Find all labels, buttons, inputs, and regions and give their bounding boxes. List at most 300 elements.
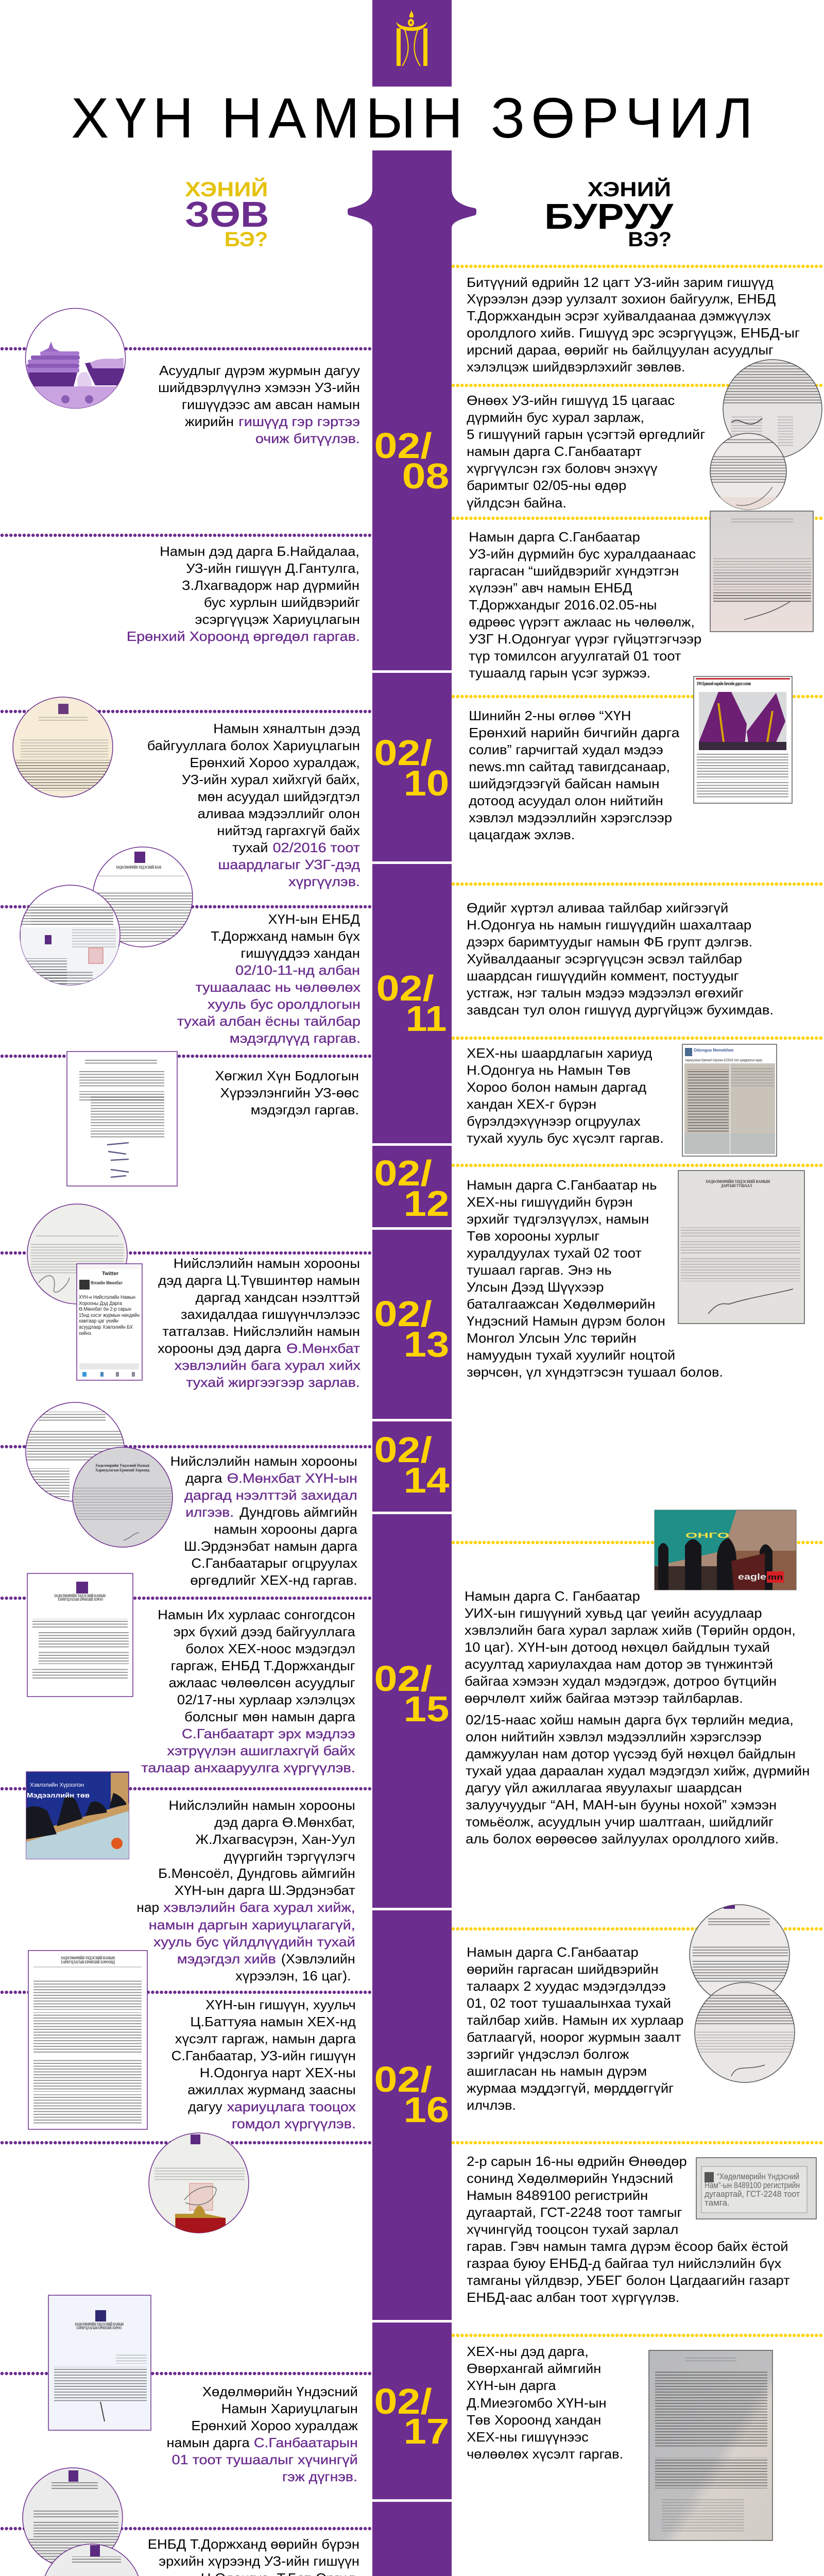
image: facebook request screenshot: Хариуцлагын Ерөнхий Хорооны 02/2016 тоот шаардлагын хариу xyxy=(685,1058,762,1062)
text: right block 8: асуултад хариулахдаа нам дотор эв түнжинтэй xyxy=(465,1656,773,1672)
text: right block 6 xyxy=(467,1045,664,1146)
text: right block 8: 02/15-наас хойш намын дарга бүх төрлийн медиа, xyxy=(466,1712,794,1727)
text: right block 3: тушаалд гарын үсэг зуржээ. xyxy=(469,665,650,681)
text: right block 9: Намын дарга С.Ганбаатар xyxy=(467,1944,639,1960)
image: open letter page circle xyxy=(26,1402,125,1501)
text: left block 7: дарга xyxy=(185,1470,222,1486)
text: right block 1: хэлэлцэж шийдвэрлэхийг зөвлөв. xyxy=(467,359,685,375)
date labels: 10 xyxy=(404,763,449,803)
text: right block 1: Т.Доржхандын эсрэг хуйвалдаанаа дэмжүүлэх xyxy=(467,308,771,324)
date labels: 02/ xyxy=(374,426,432,466)
image: newspaper clipping: “Хөдөлмөрийн Үндэсний xyxy=(717,2172,799,2181)
text: right block 11: Д.Миеэгомбо ХҮН-ын xyxy=(467,2395,607,2411)
text: left block 8: эрх бүхий дээд байгууллага xyxy=(174,1624,355,1639)
date labels: 11 xyxy=(406,998,447,1039)
image: request document xyxy=(649,2350,772,2540)
text: right block 4: дотоод асуудал олон нийтийн xyxy=(469,793,663,808)
text: left block 5: Хөгжил Хүн Бодлогын xyxy=(215,1068,359,1083)
text: left block 10 xyxy=(171,1997,356,2131)
text: right block 4: Ерөнхий нарийн бичгийн дарга xyxy=(469,725,680,740)
text: right block 11: ХЕХ-ны дэд дарга, xyxy=(467,2344,589,2359)
text: right block 5: Н.Одонгуа нь намын гишүүдийн шахалтаар xyxy=(467,917,751,933)
image: twitter phone screenshot: хамтаар цаг үеийн xyxy=(79,1318,118,1324)
text: right block 4: солив” гарчигтай худал мэдээ xyxy=(469,742,663,757)
text: right block 8: өөрчлөлт хийж байгаа мэтээр тайлбарлав. xyxy=(465,1690,743,1706)
text: left block 8: Намын Их хурлаас сонгогдсон xyxy=(158,1607,355,1622)
text: left block 9: намын даргын хариуцлагагүй, xyxy=(149,1917,355,1933)
text: left block 3: Ерөнхий Хороо хуралдаж, xyxy=(190,755,360,770)
image: stamp letter circle xyxy=(149,2133,249,2233)
text: left block 9 xyxy=(136,1798,355,1984)
text: right block 7: Намын дарга С.Ганбаатар нь xyxy=(467,1177,657,1193)
date labels: 02/ xyxy=(374,1153,432,1193)
text: right block 10: сонинд Хөдөлмөрийн Үндэсний xyxy=(467,2171,673,2186)
text: left block 3: байгууллага болох Хариуцлагын xyxy=(147,738,360,753)
image: grey letter circle: Хариуцлагын Ерөнхий Хороонд xyxy=(95,1468,149,1472)
image: document circle with signature xyxy=(710,433,787,510)
text: right block 3: Т.Доржхандыг 2016.02.05-ны xyxy=(469,597,657,613)
text: left block 8: 02/17-ны хурлаар хэлэлцэх xyxy=(177,1692,355,1707)
text: left block 1: Асуудлыг дүрэм журмын дагуу xyxy=(159,363,360,378)
image: facebook post circle xyxy=(20,885,120,987)
text: right block 8: аль болох өөрөөсөө зайлуулах оролдлого хийв. xyxy=(466,1831,779,1846)
text: right block 5: дээрх баримтуудыг намын ФБ групт дэлгэв. xyxy=(467,934,752,950)
text: right block 9: батлаагүй, ноорог журмын заалт xyxy=(467,2029,681,2045)
text: right block 8: Намын дарга С. Ганбаатар xyxy=(465,1588,640,1604)
text: left block 10: хариуцлага тооцох xyxy=(227,2099,356,2114)
image: committee decision document: ХАРИУЦЛАГЫН ЕРӨНХИЙ ХОРОО xyxy=(76,2326,122,2330)
image: second letter circle with signature xyxy=(695,1982,795,2082)
text: right block 3: хүлээн” авч намын ЕНБД xyxy=(469,580,632,596)
text: left block 12 xyxy=(148,2536,359,2576)
text: right block 8: олон нийтийн хэвлэл мэдээллийн хэрэгслээр xyxy=(466,1729,762,1744)
text: left block 2: УЗ-ийн гишүүн Д.Гантулга, xyxy=(186,561,359,576)
image: twitter phone screenshot: 15нд хэсэг журмын нөхдийн xyxy=(79,1313,140,1318)
image: press conference photo: mn xyxy=(768,1573,783,1582)
text: left block 2: бус хурлын шийдвэрийг xyxy=(204,595,360,610)
text: right block 3: өдрөөс үүрэгт ажлаас нь чөлөөлж, xyxy=(469,614,695,630)
text: left block 4: мэдэгдлүүд гаргав. xyxy=(230,1030,360,1046)
text: left block 8: болсныг мөн намын дарга xyxy=(184,1709,355,1724)
text: left block 4: тушаалаас нь чөлөөлөх xyxy=(196,979,360,995)
text: left block 9: нар xyxy=(136,1900,159,1915)
purple dotted separators on the left xyxy=(2,349,371,2576)
text: left block 5 xyxy=(215,1068,359,1117)
text: left block 7: өргөдлийг ХЕХ-нд гаргав. xyxy=(190,1572,357,1588)
text: left block 10: ажиллах журманд заасны xyxy=(187,2082,356,2097)
text: left block 6: захидалдаа гишүүнчлэлээс xyxy=(181,1307,360,1322)
text: right block 9: журмаа мэддэггүй, мөрддөггүйг xyxy=(467,2080,674,2096)
text: right block 8: дамжуулан нам дотор үүсээд буй нөхцөл байдлын xyxy=(466,1746,796,1761)
text: right block 7: зөрчсөн, үл хүндэтгэсэн тушаал болов. xyxy=(467,1364,723,1380)
text: right block 1: ирсний дараа, өөрийг нь байлцуулан асуудлыг xyxy=(467,342,774,358)
text: left block 9: Нийслэлийн намын хорооны xyxy=(169,1798,355,1813)
text: right block 7: эрхийг түдгэлзүүлэх, намын xyxy=(467,1211,649,1227)
date labels: 02/ xyxy=(374,1430,432,1470)
text: right block 6: ХЕХ-ны шаардлагын хариуд xyxy=(467,1045,652,1061)
image: committee decision document xyxy=(48,2295,151,2430)
text: right block 5: шаардсан гишүүдийн коммент, постуудыг xyxy=(467,968,739,984)
image: facebook request screenshot: Odongua Nemekhee xyxy=(694,1048,734,1053)
text: left block 4: гишүүддээ хандан xyxy=(241,945,360,961)
text: right block 2: 5 гишүүний гарын үсэгтэй өргөдлийг xyxy=(467,427,705,442)
yellow dotted separators on the right xyxy=(453,266,824,2335)
text: left block 3: шаардлагыг УЗГ-дэд xyxy=(218,857,360,872)
text: right block 7: Монгол Улсын Улс төрийн xyxy=(467,1330,637,1346)
text: left block 3: 02/2016 тоот xyxy=(273,840,360,855)
text: left block 11: Намын Хариуцлагын xyxy=(221,2401,358,2416)
text: left block 5: Хүрээлэнгийн УЗ-өөс xyxy=(220,1085,359,1100)
text: right block 3: УЗГ Н.Одонгуаг үүрэг гүйцэтгэгчээр xyxy=(469,631,701,647)
text: left block 8: гаргаж, ЕНБД Т.Доржхандыг xyxy=(171,1658,355,1673)
text: left block 9: дэд дарга Ө.Мөнхбат, xyxy=(214,1815,355,1830)
text: right block 8 xyxy=(465,1588,810,1846)
text: left block 9: дүүргийн тэргүүлэгч xyxy=(224,1849,355,1864)
heading: whose right: ЗӨВ xyxy=(185,194,269,234)
text: right block 9: зэргийг үндэслэл болгож xyxy=(467,2046,629,2062)
image: statement circle xyxy=(13,697,113,797)
text: right block 9: талаарх 2 хуудас мэдэгдэлдээ xyxy=(467,1978,666,1994)
text: left block 2: Ерөнхий Хороонд өргөдөл гаргав. xyxy=(127,629,360,644)
date labels: 16 xyxy=(404,2090,449,2130)
text: right block 10: газраа буюу ЕНБД-д байгаа тул нийслэлийн бүх xyxy=(467,2256,781,2271)
image: news article screenshot: ХҮН Ерөнхий нарийн бичгийн дарга солив xyxy=(697,681,751,686)
image: letter circle: ХӨДӨЛМӨРИЙН ҮНДЭСНИЙ НАМ xyxy=(116,865,161,870)
image: complaint document: ХӨДӨЛМӨРИЙН ҮНДЭСНИЙ НАМЫН xyxy=(61,1956,115,1960)
text: left block 12: ЕНБД Т.Доржханд өөрийн бүрэн xyxy=(148,2536,359,2552)
image: committee statement document: ХАРИУЦЛАГЫН ЕРӨНХИЙ ХОРОО xyxy=(58,1597,103,1602)
date labels xyxy=(374,426,449,2576)
image: newspaper clipping xyxy=(696,2158,816,2219)
image: explanation letter circle xyxy=(690,1905,789,2005)
text: left block 8: болох ХЕХ-ноос мэдэгдэл xyxy=(185,1641,355,1656)
image: twitter phone screenshot: Өлзийн Мөнхбат xyxy=(91,1280,123,1285)
text: right block 7: баталгаажсан Хөдөлмөрийн xyxy=(467,1296,655,1312)
text: left block 2 xyxy=(127,544,360,644)
text: left block 11: С.Ганбаатарын xyxy=(254,2435,358,2450)
text: left block 5: мэдэгдэл гаргав. xyxy=(251,1102,359,1117)
text: left block 7: намын хорооны дарга xyxy=(214,1521,357,1537)
date labels: 15 xyxy=(404,1689,449,1729)
text: left block 3: нийтэд гаргахгүй байх xyxy=(217,823,360,838)
image: twitter phone screenshot: ХҮН-н Нийслэлийн Намын xyxy=(79,1295,135,1300)
text: right block 3: Намын дарга С.Ганбаатар xyxy=(469,529,640,545)
text: left block 10: дагуу xyxy=(188,2099,223,2114)
text: right block 5 xyxy=(467,900,774,1018)
text: right block 8: УИХ-ын гишүүний хувьд цаг үеийн асуудлаар xyxy=(465,1605,762,1621)
text: left block 4: Т.Доржханд намын бүх xyxy=(211,928,360,944)
date labels: 13 xyxy=(404,1324,449,1364)
text: right block 4: news.mn сайтад тавигдсанаар, xyxy=(469,759,670,774)
text: right block 7: тушаал гаргав. Энэ нь xyxy=(467,1262,612,1278)
text: right block 8: дагуу үйл ажиллагаа явуулахыг шаардсан xyxy=(466,1780,742,1795)
text: right block 4: Шинийн 2-ны өглөө “ХҮН xyxy=(469,708,631,723)
image: committee statement document: ХӨДӨЛМӨРИЙН ҮНДЭСНИЙ НАМЫН xyxy=(54,1594,106,1598)
text: right block 7 xyxy=(467,1177,723,1380)
text: right block 4 xyxy=(469,708,680,842)
text: left block 3: Намын хяналтын дээд xyxy=(213,721,360,736)
text: right block 9 xyxy=(467,1944,684,2113)
heading: whose right: БЭ? xyxy=(225,227,268,251)
date labels: 02/ xyxy=(374,1294,432,1334)
text: right block 8: хэвлэлийн бага хурал зарлаж хийв (Төрийн ордон, xyxy=(465,1622,796,1638)
text: left block 6: Нийслэлийн намын хорооны xyxy=(174,1256,360,1271)
text: left block 9: ХҮН-ын дарга Ш.Эрдэнэбат xyxy=(175,1883,355,1898)
text: right block 11: Өвөрхангай аймгийн xyxy=(467,2361,601,2376)
text: left block 10: Н.Одонгуа нарт ХЕХ-ны xyxy=(200,2065,356,2080)
icon: party emblem xyxy=(396,10,427,66)
text: right block 2: намын дарга С.Ганбаатарт xyxy=(467,444,642,459)
text: right block 10: хүчингүйд тооцсон тухай зарлал xyxy=(467,2222,678,2237)
text: right block 9: өөрийн гаргасан шийдвэрийн xyxy=(467,1961,659,1977)
text: left block 12: эрхийн хүрээнд УЗ-ийн гишүүн xyxy=(159,2553,359,2569)
image: twitter phone screenshot: Ө.Мөнхбат би 2-р сарын xyxy=(79,1306,131,1312)
image: twitter phone screenshot xyxy=(77,1264,142,1380)
text: right block 2: үйлдсэн байна. xyxy=(467,495,566,511)
image: purple monument photo xyxy=(25,308,128,410)
date labels: 02/ xyxy=(374,1658,432,1699)
image: press conference photo: eagle xyxy=(738,1572,766,1582)
text: right block 4: цацагдаж эхлэв. xyxy=(469,827,575,842)
text: right block 1: Хүрээлэн дээр уулзалт зохион байгуулж, ЕНБД xyxy=(467,291,776,307)
text: left block 11: 01 тоот тушаалыг хүчингүй xyxy=(172,2452,358,2467)
text: right block 3: гаргасан “шийдвэрийг хүндэтгэн xyxy=(469,563,679,579)
image: twitter phone screenshot: Хорооны Дэд Дарга xyxy=(79,1301,122,1307)
date labels: 14 xyxy=(404,1460,449,1500)
text: right block 11: ХҮН-ын дарга xyxy=(467,2378,556,2393)
image: press conference photo: ОНГО xyxy=(685,1531,730,1540)
image: letter circle xyxy=(93,847,193,947)
text: left block 9: Ж.Лхагвасүрэн, Хан-Уул xyxy=(196,1832,355,1847)
text: right block 6: хандан ХЕХ-г бүрэн xyxy=(467,1096,596,1112)
text: left block 9: хэвлэлийн бага хурал хийж, xyxy=(163,1900,355,1915)
text: left block 4: 02/10-11-нд албан xyxy=(235,962,360,978)
image: order B/24 circle xyxy=(23,2468,123,2568)
image: order 02 document xyxy=(678,1171,804,1324)
text: left block 7: Ш.Эрдэнэбат намын дарга xyxy=(184,1538,357,1554)
text: left block 6: дэд дарга Ц.Түвшинтөр намын xyxy=(158,1273,360,1288)
text: left block 8: С.Ганбаатарт эрх мэдлээ xyxy=(182,1726,355,1741)
text: right block 3: түр томилсон агуулгатай 01 тоот xyxy=(469,648,681,664)
text: right block 1 xyxy=(467,275,800,375)
text: right block 7: хуралдуулах тухай 02 тоот xyxy=(467,1245,642,1261)
text: left block 3 xyxy=(147,721,360,889)
text: left block 10: хүсэлт гаргаж, намын дарга xyxy=(175,2031,356,2046)
text: right block 10: ЕНБД-аас албан тоот хүргүүлэв. xyxy=(467,2290,679,2305)
image: grey letter circle xyxy=(73,1447,173,1547)
text: right block 10: тамганы үйлдвэр, УБЕГ болон Цагдаагийн газарт xyxy=(467,2273,790,2288)
text: left block 10: гомдол хүргүүлэв. xyxy=(232,2116,356,2131)
text: right block 6: тухай хууль бус хүсэлт гаргав. xyxy=(467,1130,664,1146)
text: right block 4: хэвлэл мэдээллийн хэрэгслээр xyxy=(469,810,672,825)
text: right block 3 xyxy=(469,529,701,681)
text: right block 7: намуудын тухай хуулийг ноцтой xyxy=(467,1347,675,1363)
text: left block 8: ажлаас чөлөөлсөн асуудлыг xyxy=(169,1675,355,1690)
text: right block 2: хүргүүлсэн гэх боловч энэхүү xyxy=(467,461,658,476)
heading: whose right: ХЭНИЙ xyxy=(185,177,268,201)
image: media centre press photo xyxy=(26,1772,129,1859)
date labels: 02/ xyxy=(374,2059,432,2099)
text: right block 7: Үндэсний Намын дүрэм болон xyxy=(467,1313,665,1329)
text: right block 7: ХЕХ-ны гишүүдийн бүрэн xyxy=(467,1194,633,1210)
heading: whose wrong xyxy=(544,177,674,251)
text: right block 10 xyxy=(467,2154,790,2305)
text: right block 3: УЗ-ийн дүрмийн бус хуралдаанаас xyxy=(469,546,696,562)
text: right block 6: Н.Одонгуа нь Намын Төв xyxy=(467,1062,630,1078)
text: left block 4: хууль бус оролдлогын xyxy=(208,996,360,1012)
text: left block 6: татгалзав. Нийслэлийн намын xyxy=(162,1324,360,1339)
image: twitter phone screenshot: хийнэ. xyxy=(79,1331,92,1336)
date labels: 12 xyxy=(404,1183,449,1224)
text: right block 8: залуучуудыг “АН, МАН-ын бууны нохой” хэмээн xyxy=(466,1797,777,1812)
text: right block 11: Төв Хороонд хандан xyxy=(467,2412,601,2428)
text: left block 1 xyxy=(158,363,360,446)
text: left block 1: жирийн xyxy=(185,414,234,429)
heading: whose wrong: ХЭНИЙ xyxy=(588,177,671,201)
text: right block 8: тухай удаа дараалан худал мэдэгдэл хийж, дүрмийн xyxy=(466,1763,810,1778)
text: left block 6: тухай жиргээгээр зарлав. xyxy=(186,1375,360,1390)
text: right block 9: илчлэв. xyxy=(467,2097,516,2113)
text: left block 11: намын дарга xyxy=(166,2435,250,2450)
text: left block 11: Ерөнхий Хороо хуралдаж xyxy=(191,2418,358,2433)
heading: whose wrong: БУРУУ xyxy=(544,196,674,236)
text: right block 2: баримтыг 02/05-ны өдөр xyxy=(467,478,626,493)
text: right block 2: Өнөөх УЗ-ийн гишүүд 15 цагаас xyxy=(467,393,675,408)
text: right block 9: 01, 02 тоот тушаалынхаа тухай xyxy=(467,1995,671,2011)
image: complaint document xyxy=(28,1951,147,2129)
text: right block 4: шийдэгдээгүй байсан намын xyxy=(469,776,660,791)
image: order 02 document: ДАРГЫН ТУШААЛ xyxy=(721,1183,752,1188)
text: left block 4 xyxy=(177,911,360,1046)
text: left block 3: УЗ-ийн хурал хийхгүй байх, xyxy=(182,772,360,787)
text: right block 11: чөлөөлөх хүсэлт гаргав. xyxy=(467,2446,623,2462)
text: left block 9: хууль бус үйлдлүүдийн тухай xyxy=(153,1934,355,1950)
image: committee decision document: ХӨДӨЛМӨРИЙН ҮНДЭСНИЙ НАМЫН xyxy=(75,2322,124,2327)
text: left block 6: хорооны дэд дарга xyxy=(158,1341,281,1356)
text: left block 11: Хөдөлмөрийн Үндэсний xyxy=(202,2384,358,2399)
heading: whose wrong: ВЭ? xyxy=(628,227,672,251)
text: left block 1: гишүүд гэр гэртээ xyxy=(238,414,360,429)
image: chairman order document xyxy=(710,511,813,632)
image: complaint document: ХАРИУЦЛАГЫН ЕРӨНХИЙ ХОРООНД xyxy=(61,1960,115,1964)
date labels: 02/ xyxy=(374,733,432,773)
text: left block 8: хэтрүүлэн ашиглахгүй байх xyxy=(167,1743,355,1758)
image: newspaper clipping: тамга. xyxy=(705,2198,730,2208)
text: left block 1: шийдвэрлүүлнэ хэмээн УЗ-ийн xyxy=(158,380,360,395)
text: right block 9: тайлбар хийв. Намын их хурлаар xyxy=(467,2012,684,2028)
text: left block 11: гэж дүгнэв. xyxy=(282,2469,357,2484)
text: left block 3: аливаа мэдээллийг олон xyxy=(198,806,360,821)
image: newspaper clipping: дугаартай, ГСТ-2248 тоот xyxy=(705,2189,800,2199)
image: document circle xyxy=(723,360,824,459)
image: facebook request screenshot xyxy=(682,1044,777,1156)
image: order B/25 circle xyxy=(42,2544,142,2576)
text: left block 7: С.Ганбаатарыг огцруулах xyxy=(191,1555,357,1571)
text: right block 2: дүрмийн бус хурал зарлаж, xyxy=(467,410,644,425)
text: left block 9: Б.Мөнсоёл, Дундговь аймгийн xyxy=(158,1866,355,1881)
title: ХҮН НАМЫН ЗӨРЧИЛ xyxy=(71,87,753,150)
text: left block 3: хүргүүлэв. xyxy=(288,874,360,889)
text: left block 4: ХҮН-ын ЕНБД xyxy=(268,911,360,927)
text: left block 6 xyxy=(158,1256,360,1390)
image: newspaper clipping: Нам”-ын 8489100 регистрийн xyxy=(705,2180,800,2190)
text: left block 2: эсэргүүцэж Хариуцлагын xyxy=(195,612,360,627)
text: right block 10: дугаартай, ГСТ-2248 тоот тамгыг xyxy=(467,2205,682,2220)
image: twitter phone screenshot: Twitter xyxy=(102,1271,118,1277)
text: left block 10: С.Ганбаатар, УЗ-ийн гишүүн xyxy=(171,2048,356,2063)
image: institute statement document xyxy=(67,1052,177,1186)
text: left block 10: Ц.Баттуяа намын ХЕХ-нд xyxy=(190,2014,356,2029)
text: right block 10: 2-р сарын 16-ны өдрийн Өнөөдөр xyxy=(467,2154,687,2169)
text: right block 11: ХЕХ-ны гишүүнээс xyxy=(467,2429,589,2445)
image: committee statement document xyxy=(27,1573,133,1697)
text: right block 5: завдсан тул олон гишүүд дургүйцэж бухимдав. xyxy=(467,1002,774,1018)
text: left block 2: З.Лхагвадорж нар дүрмийн xyxy=(182,578,359,593)
text: right block 11 xyxy=(467,2344,623,2462)
text: left block 6: хэвлэлийн бага хурал хийх xyxy=(175,1358,360,1373)
image: press conference photo xyxy=(655,1510,796,1590)
text: left block 3: тухай xyxy=(232,840,268,855)
text: right block 5: Хуйвалдааныг эсэргүүцсэн эсвэл тайлбар xyxy=(467,951,742,967)
image: grey letter circle: Хөдөлмөрийн Үндэсний Намын xyxy=(95,1463,149,1468)
text: right block 5: устгаж, нэг талын мэдээ мэдээлэл өгөхийг xyxy=(467,985,744,1001)
text: left block 2: Намын дэд дарга Б.Найдалаа, xyxy=(160,544,359,559)
text: right block 8: 10 цаг). ХҮН-ын дотоод нөхцөл байдлын тухай xyxy=(465,1639,770,1655)
text: left block 6: Ө.Мөнхбат xyxy=(286,1341,360,1356)
text: right block 9: ашигласан нь намын дүрэм xyxy=(467,2063,647,2079)
text: right block 8: байгаа хэмээн худал мэдэгдэж, дотроо бүтцийн xyxy=(465,1673,777,1689)
text: right block 5: Өдийг хүртэл аливаа тайлбар хийгээгүй xyxy=(467,900,728,916)
text: left block 8 xyxy=(141,1607,355,1775)
text: right block 10: гарав. Гэвч намын тамга дүрэм ёсоор байх ёстой xyxy=(467,2239,788,2254)
text: left block 7: илгээв. xyxy=(185,1504,234,1520)
text: left block 1: очиж битүүлэв. xyxy=(255,431,360,446)
date labels: 02/ xyxy=(374,2381,432,2421)
text: left block 9: мэдэгдэл хийв xyxy=(177,1951,276,1967)
text: left block 7 xyxy=(170,1453,357,1588)
text: left block 11 xyxy=(166,2384,358,2484)
text: right block 7: Улсын Дээд Шүүхээр xyxy=(467,1279,604,1295)
text: right block 2 xyxy=(467,393,705,511)
text: left block 6: даргад хандсан нээлттэй xyxy=(196,1290,360,1305)
text: right block 1: Битүүний өдрийн 12 цагт УЗ-ийн зарим гишүүд xyxy=(467,275,774,290)
image: open letter circle xyxy=(27,1204,127,1304)
image: order 02 document: ХӨДӨЛМӨРИЙН ҮНДЭСНИЙ НАМЫН xyxy=(706,1179,770,1184)
image: media centre press photo: Хэвлэлийн Хүрээлэн xyxy=(30,1782,84,1788)
date labels: 02/ xyxy=(376,968,434,1008)
date labels: 08 xyxy=(402,456,449,496)
text: right block 8: томьёолж, асуудлын учир шалтгаан, шийдлийг xyxy=(466,1814,774,1829)
text: left block 9: (Хэвлэлийн xyxy=(281,1951,355,1967)
text: left block 1: гишүүдээс ам авсан намын xyxy=(182,397,360,412)
text: left block 7: даргад нээлттэй захидал xyxy=(184,1487,357,1503)
image: media centre press photo: Мэдээллийн төв xyxy=(27,1791,90,1799)
text: right block 1: оролдлого хийв. Гишүүд эрс эсэргүүцэж, ЕНБД-ыг xyxy=(467,325,800,341)
text: right block 6: Хороо болон намын даргад xyxy=(467,1079,646,1095)
text: left block 3: мөн асуудал шийдэгдтэл xyxy=(198,789,360,804)
text: left block 4: тухай албан ёсны тайлбар xyxy=(177,1013,360,1029)
text: right block 7: Төв хорооны хурлыг xyxy=(467,1228,599,1244)
text: left block 10: ХҮН-ын гишүүн, хуульч xyxy=(205,1997,356,2012)
purple central band xyxy=(348,0,476,2576)
text: right block 6: бүрэлдэхүүнээр огцруулах xyxy=(467,1113,641,1129)
text: left block 7: Ө.Мөнхбат ХҮН-ын xyxy=(227,1470,357,1486)
text: left block 7: Нийслэлийн намын хорооны xyxy=(170,1453,357,1469)
text: left block 7: Дундговь аймгийн xyxy=(239,1504,357,1520)
image: twitter phone screenshot: асуудлаар Хэвлэлийн БХ xyxy=(79,1325,133,1330)
text: right block 10: Намын 8489100 регистрийн xyxy=(467,2188,648,2203)
image: news article screenshot xyxy=(694,676,792,803)
